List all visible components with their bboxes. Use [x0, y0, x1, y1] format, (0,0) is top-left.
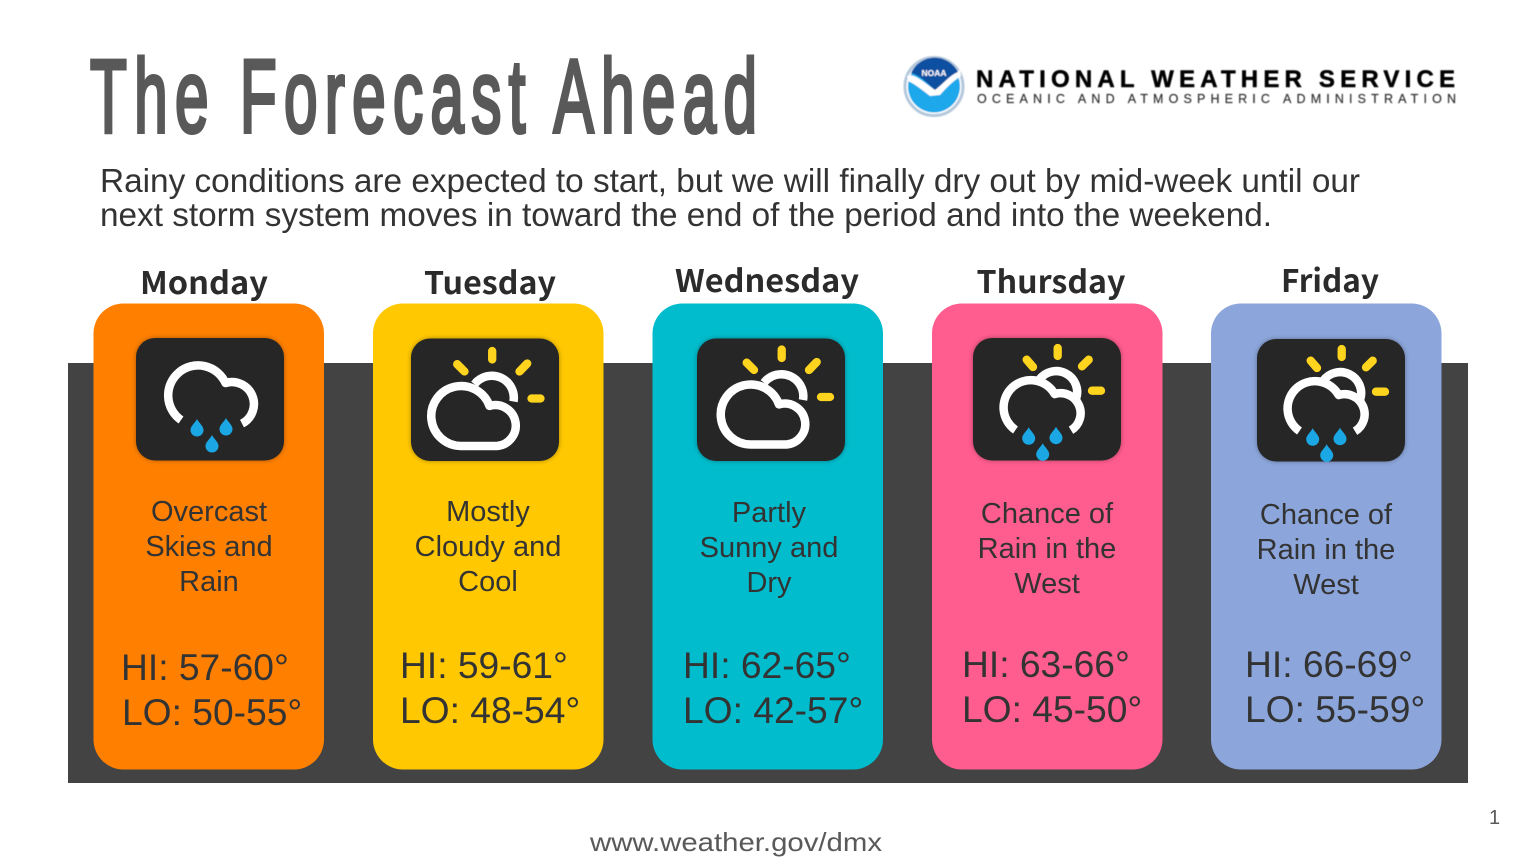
- text: temperatures: HI: 62-65°: [683, 644, 851, 686]
- panel: Tuesday: [373, 258, 604, 770]
- subtitle text block: next storm system moves in toward the end of the period and into the weekend.: [100, 196, 1272, 233]
- text: condition: Dry: [746, 567, 792, 599]
- text: condition: Rain: [179, 566, 239, 598]
- heading: Thursday: Thursday: [976, 257, 1126, 302]
- panel: Friday: [1211, 256, 1442, 770]
- text: condition: Cool: [458, 566, 518, 598]
- text: temperatures: [400, 644, 580, 731]
- text: condition: Rain in the: [1257, 534, 1395, 566]
- panel: Thursday: [932, 257, 1162, 770]
- heading: Friday: Friday: [1281, 256, 1379, 301]
- page number: 1: [1489, 807, 1500, 829]
- panel: Wednesday: [652, 256, 883, 770]
- text: temperatures: [1245, 643, 1425, 730]
- heading: Wednesday: Wednesday: [675, 256, 859, 301]
- text: temperatures: LO: 48-54°: [400, 689, 580, 731]
- text: condition: Cloudy and: [415, 531, 561, 563]
- icon: partly sunny: [697, 338, 845, 461]
- subtitle text block: Rainy conditions are expected to start, but we will finally dry out by mid-week until our: [100, 162, 1360, 199]
- title: The Forecast Ahead: [90, 39, 757, 155]
- icon: chance of rain with sun: [1257, 339, 1405, 462]
- text: condition: Chance of: [1260, 499, 1393, 531]
- text: temperatures: HI: 66-69°: [1245, 643, 1413, 685]
- subtitle text block: [100, 162, 1360, 233]
- text: condition: Chance of: [981, 498, 1114, 530]
- text: condition: Sunny and: [700, 532, 838, 564]
- text: condition: [978, 498, 1116, 600]
- icon: NOAA emblem: [905, 58, 963, 116]
- text: condition: Partly: [732, 497, 807, 529]
- heading: National Weather Service: NATIONAL WEATHER SERVICE: [976, 66, 1455, 93]
- panel: Monday: [94, 258, 324, 770]
- text: condition: [700, 497, 838, 599]
- icon: rain cloud: [136, 338, 284, 460]
- text: condition: [415, 496, 561, 598]
- text: temperatures: LO: 55-59°: [1245, 688, 1425, 730]
- text: temperatures: LO: 42-57°: [683, 689, 863, 731]
- icon: partly cloudy: [411, 338, 559, 461]
- text: temperatures: [683, 644, 863, 731]
- text: temperatures: LO: 50-55°: [122, 691, 302, 733]
- logo: NOAA National Weather Service: [905, 58, 1456, 116]
- heading: Monday: Monday: [140, 258, 268, 303]
- dark background band: [68, 363, 1468, 783]
- text: Oceanic and Atmospheric Administration: OCEANIC AND ATMOSPHERIC ADMINISTRATION: [977, 92, 1456, 106]
- text: condition: Skies and: [145, 531, 273, 563]
- text: temperatures: HI: 57-60°: [121, 646, 289, 688]
- text: temperatures: [121, 646, 302, 733]
- text: condition: Mostly: [446, 496, 530, 528]
- icon: NOAA emblem: NOAA: [921, 68, 947, 78]
- text: condition: West: [1014, 568, 1080, 600]
- heading: Tuesday: Tuesday: [424, 258, 556, 303]
- text: temperatures: HI: 63-66°: [962, 643, 1130, 685]
- text: condition: Rain in the: [978, 533, 1116, 565]
- icon: chance of rain with sun: [973, 338, 1121, 461]
- footer URL: www.weather.gov/dmx: [589, 827, 882, 857]
- text: temperatures: [962, 643, 1142, 730]
- text: temperatures: LO: 45-50°: [962, 688, 1142, 730]
- text: temperatures: HI: 59-61°: [400, 644, 568, 686]
- text: condition: West: [1293, 569, 1359, 601]
- text: condition: Overcast: [151, 496, 267, 528]
- text: condition: [145, 496, 273, 598]
- text: condition: [1257, 499, 1395, 601]
